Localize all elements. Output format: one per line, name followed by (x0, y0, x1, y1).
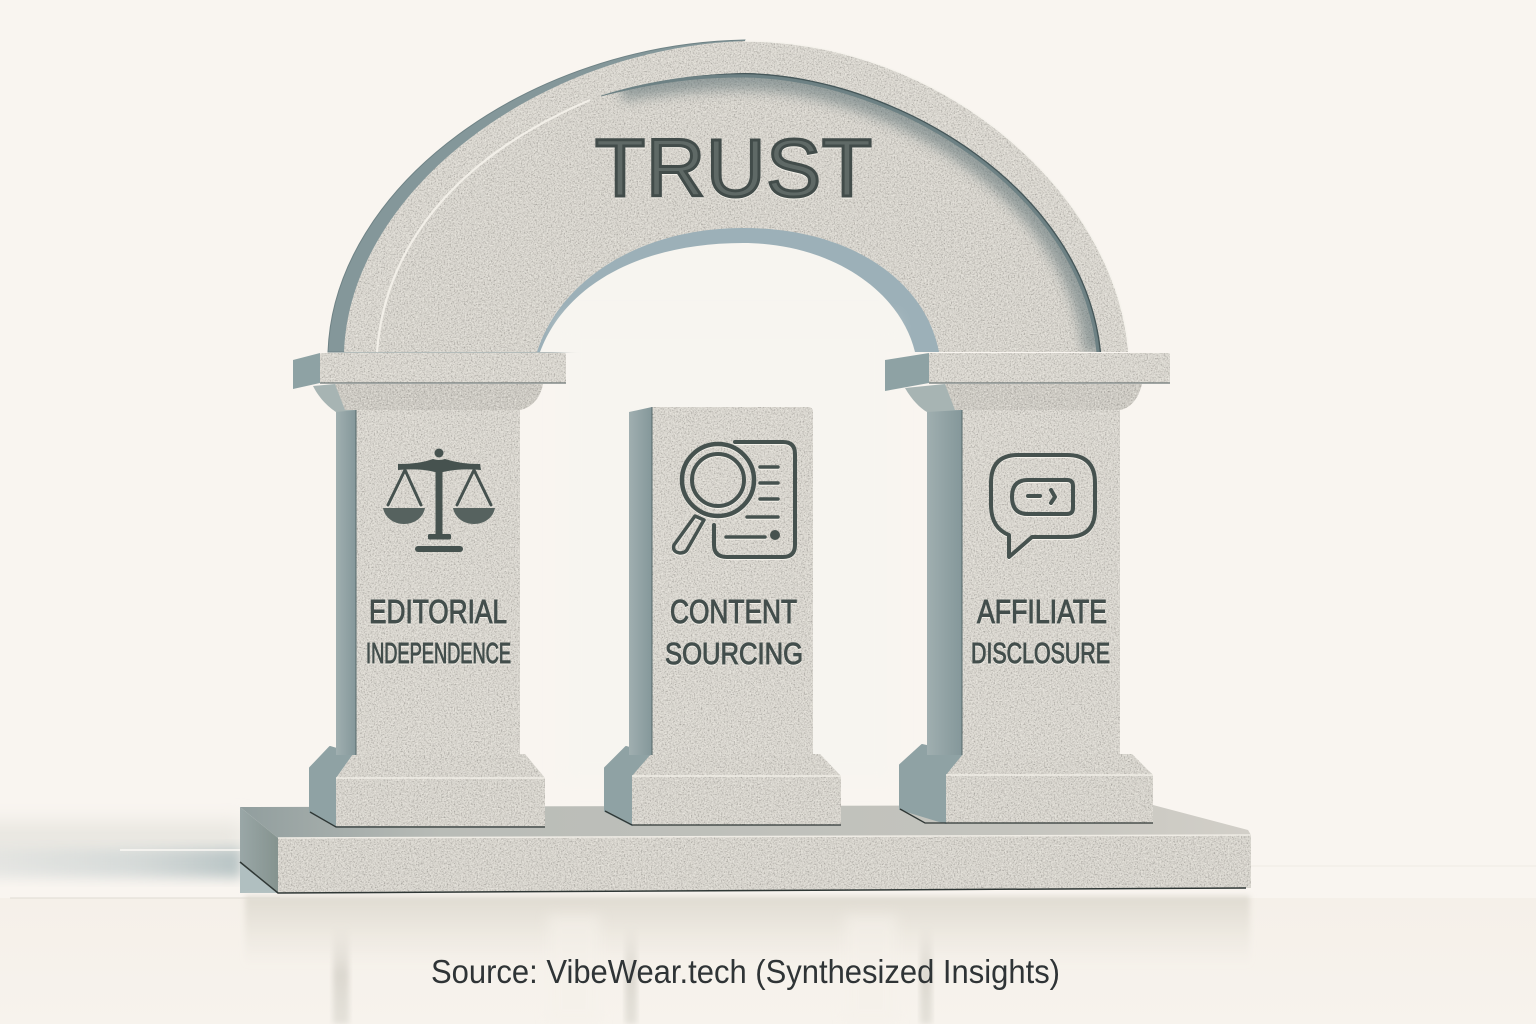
arch: TRUST (328, 40, 1129, 352)
pillar: affiliate disclosure (885, 353, 1170, 823)
pillar: editorial independence (293, 353, 566, 827)
pillar base (310, 747, 545, 827)
label: independence: INDEPENDENCE (366, 638, 511, 670)
icon: speech bubble (991, 455, 1095, 557)
platform front (278, 835, 1251, 893)
label: affiliate: AFFILIATE (977, 593, 1107, 630)
platform (240, 805, 1251, 893)
icon: magnifier and document (674, 442, 795, 557)
platform left side (240, 807, 278, 893)
capital (293, 353, 566, 412)
capital (885, 353, 1170, 412)
arch front face (344, 41, 1128, 352)
icon: scales of justice (383, 448, 495, 552)
label: disclosure: DISCLOSURE (971, 638, 1110, 670)
arch opening reveal (537, 228, 939, 352)
pillar shaft (927, 410, 962, 755)
floor with reflections (0, 822, 1536, 1024)
source caption: Source: VibeWear.tech (Synthesized Insights) (431, 953, 1060, 990)
label: content: CONTENT (670, 593, 797, 630)
pillar base (605, 747, 841, 825)
label: editorial: EDITORIAL (369, 593, 507, 630)
label: sourcing: SOURCING (665, 636, 803, 671)
pillar shaft (629, 407, 652, 755)
pillar base (900, 745, 1153, 823)
arch panel highlight (377, 100, 590, 352)
platform top (240, 805, 1251, 838)
pillar: content sourcing (605, 407, 841, 825)
arch opening (540, 243, 915, 352)
arch inner panel (601, 73, 1101, 352)
title: TRUST: TRUST (595, 123, 872, 214)
pillar shaft (336, 410, 356, 755)
arch back edge (328, 40, 745, 352)
